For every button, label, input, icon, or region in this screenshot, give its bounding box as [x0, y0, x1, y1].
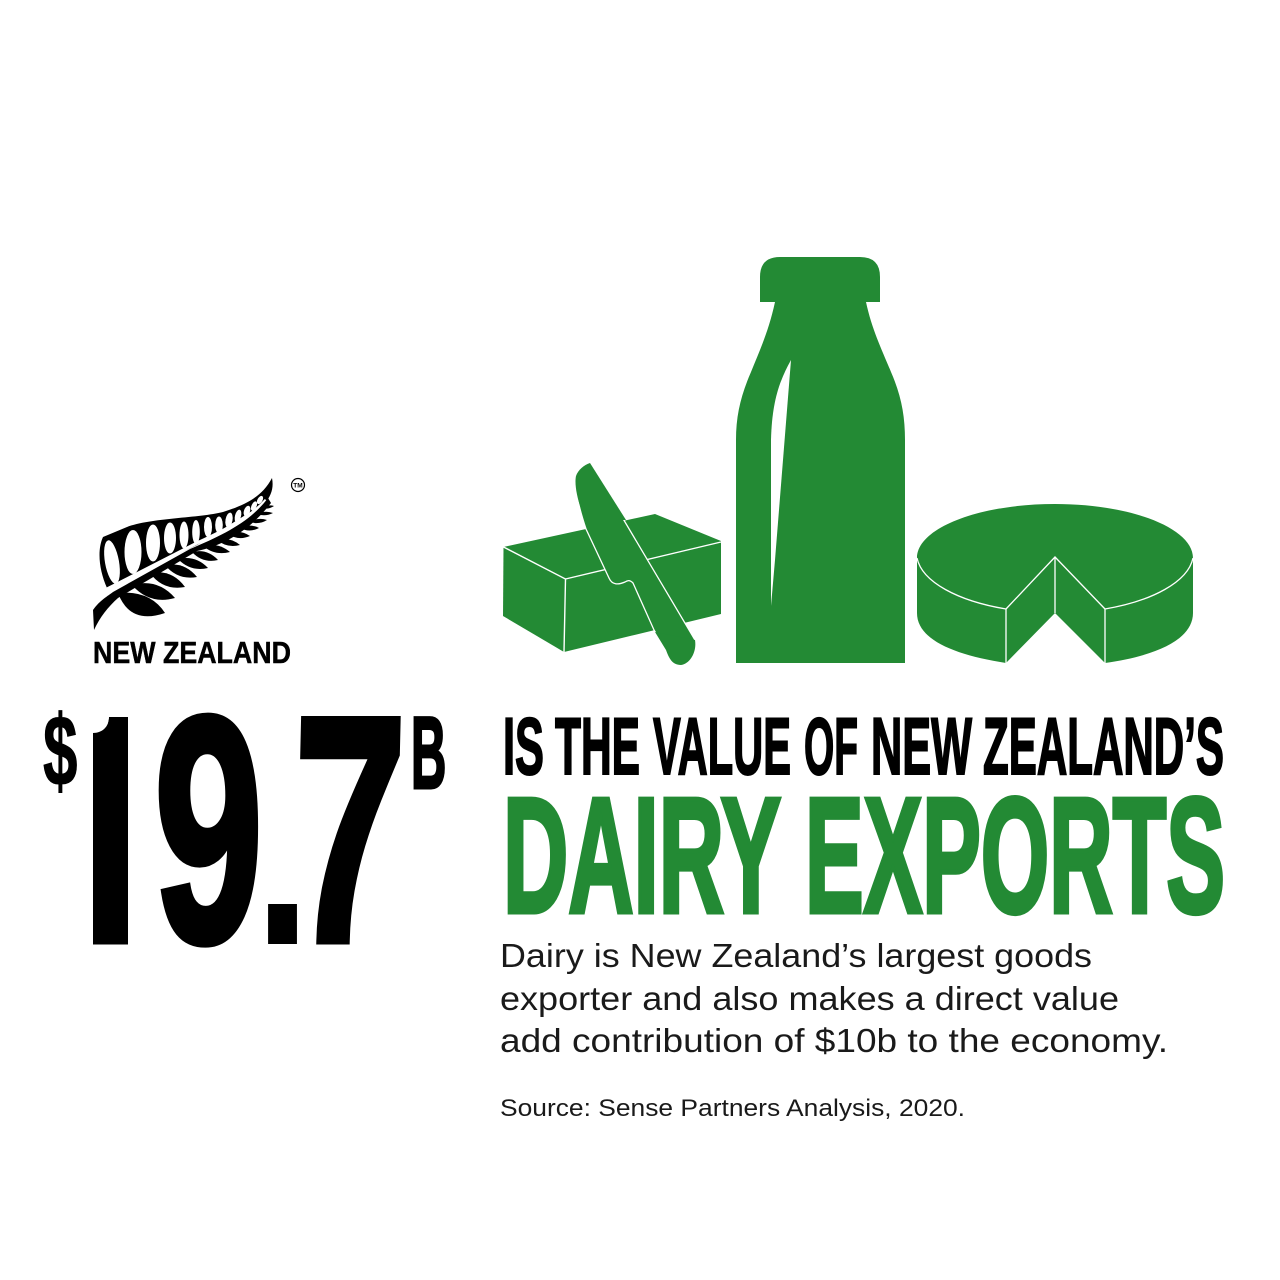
icon: trademark: TM [293, 482, 303, 490]
icon: cheese wheel [917, 504, 1193, 663]
number 19.7: . [258, 730, 307, 992]
icon: silver fern [93, 478, 274, 630]
icon: milk bottle [736, 257, 905, 663]
number 19.7: 9 [154, 650, 263, 1010]
big number: $19.7B [44, 710, 445, 948]
logo: silver fern New Zealand [93, 478, 304, 670]
source note: Source: Sense Partners Analysis, 2020. [500, 1095, 965, 1122]
body text: Dairy is New Zealand’s largest goods [500, 937, 1092, 974]
number 19.7 [93, 712, 401, 948]
heading: is the value: OF [804, 702, 858, 792]
body text: exporter and also makes a direct value [500, 980, 1119, 1017]
heading: is the value: NEW [871, 702, 972, 792]
heading: is the value: THE [555, 702, 640, 792]
heading: is the value: IS [503, 702, 544, 792]
icon: trademark [292, 478, 304, 492]
icon: butter and knife [503, 463, 721, 665]
heading: dairy exports: DAIRY [503, 764, 781, 947]
body text: add contribution of $10b to the economy. [500, 1022, 1168, 1059]
dollar sign: $ [43, 695, 77, 807]
knife [575, 463, 695, 665]
logo wordmark: NEW ZEALAND [93, 635, 291, 670]
body text [500, 937, 1168, 1059]
billion suffix: B [411, 696, 446, 810]
heading: is the value [503, 702, 1224, 792]
number 19.7: 7 [288, 650, 409, 1010]
heading: is the value: VALUE [653, 702, 791, 792]
bottle highlight [771, 360, 791, 606]
heading: dairy exports [503, 764, 1225, 947]
number 19.7: 1 [31, 649, 174, 1009]
